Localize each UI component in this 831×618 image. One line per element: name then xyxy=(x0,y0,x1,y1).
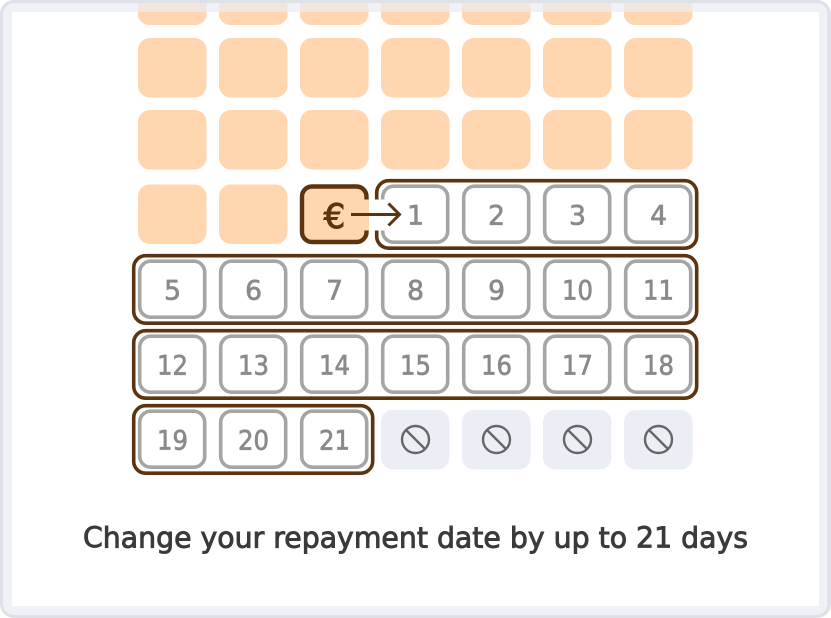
available day numbers 1 to 21: 3 xyxy=(569,200,586,232)
available day numbers 1 to 21: 11 xyxy=(643,276,674,306)
available day numbers 1 to 21: 5 xyxy=(164,276,181,306)
available day numbers 1 to 21: 12 xyxy=(157,350,188,382)
available day numbers 1 to 21: 8 xyxy=(407,276,424,306)
available day numbers 1 to 21: 6 xyxy=(245,276,262,306)
available day numbers 1 to 21: 7 xyxy=(326,276,343,306)
brown outlines grouping the 21 extra days xyxy=(134,181,697,473)
available day numbers 1 to 21: 4 xyxy=(650,200,667,232)
available day numbers 1 to 21: 13 xyxy=(238,350,269,382)
calendar: past days in peach xyxy=(138,3,692,244)
available day numbers 1 to 21: 2 xyxy=(488,200,505,232)
available day numbers 1 to 21: 10 xyxy=(562,276,593,306)
available day numbers 1 to 21: 9 xyxy=(488,276,505,306)
caption: Change your repayment date by up to 21 days xyxy=(83,521,748,554)
unavailable days with prohibited icons xyxy=(381,410,692,470)
selected day: euro payment date xyxy=(302,186,366,242)
gap in the outlines behind the arrow xyxy=(364,200,386,230)
available day numbers 1 to 21: 19 xyxy=(157,426,188,456)
arrow: from payment date to day 1 xyxy=(351,204,400,226)
available day numbers 1 to 21: 17 xyxy=(562,350,593,382)
available day numbers 1 to 21: 16 xyxy=(481,350,512,382)
available day numbers 1 to 21: 20 xyxy=(238,426,269,456)
available day numbers 1 to 21: 14 xyxy=(319,350,350,382)
available day numbers 1 to 21 xyxy=(140,186,691,467)
available day numbers 1 to 21: 15 xyxy=(400,350,431,382)
available day numbers 1 to 21: 18 xyxy=(643,350,674,382)
selected day: euro payment date: € xyxy=(324,197,345,237)
available day numbers 1 to 21: 1 xyxy=(407,200,424,232)
available day numbers 1 to 21: 21 xyxy=(319,426,350,456)
